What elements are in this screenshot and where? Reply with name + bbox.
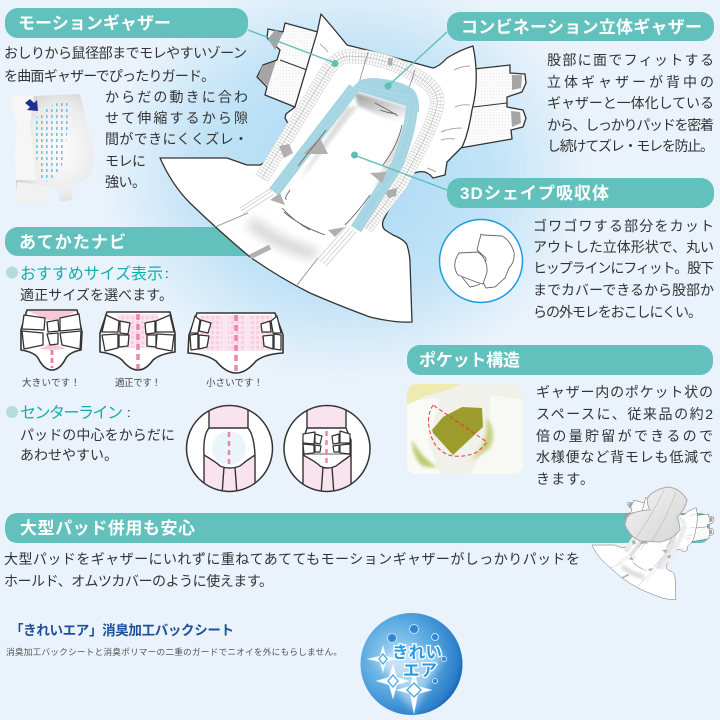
heading: pocket structure: ポケット構造 <box>419 350 520 370</box>
badge: clean air: エア <box>403 662 437 680</box>
side shade <box>298 106 406 196</box>
text: clean air description: 消臭加工バックシートと消臭ポリマーの二重のガードでニオイを外にもらしません。 <box>6 646 342 657</box>
text: combination gather description: し続けてズレ・モレを防止。 <box>547 138 714 154</box>
icon: absorber shape circle <box>440 220 522 302</box>
text: absorber description <box>533 218 714 320</box>
grey shading: lower arc <box>250 222 316 254</box>
diagram: too small <box>188 313 283 373</box>
text: large pad description <box>4 551 580 589</box>
sparkles <box>367 645 432 714</box>
text: motion gather description: からだの動きに合わ <box>105 89 248 105</box>
text: large pad description: 大型パッドをギャザーにいれずに重ねてあててもモーションギャザーがしっかりパッドを <box>4 551 580 567</box>
sparkle glow <box>375 647 444 712</box>
text: motion gather intro: おしりから鼠径部までモレやすいゾーン <box>4 45 247 61</box>
bullet: recommended size: おすすめサイズ表示 <box>20 265 163 283</box>
text: combination gather description <box>547 52 714 154</box>
grey patches <box>279 58 397 198</box>
label: correct fit: 適正です！ <box>115 377 161 389</box>
photo: pocket structure <box>407 384 523 474</box>
text: motion gather intro <box>4 45 247 84</box>
text: combination gather description: 股部に面でフィットする <box>547 52 714 68</box>
diagram: correct fit <box>100 312 175 370</box>
heading: motion gather <box>5 8 248 38</box>
heading: motion gather: モーションギャザー <box>18 14 171 33</box>
bottom mark <box>250 247 270 257</box>
badge: clean air <box>360 613 462 715</box>
label: too small: 小さいです！ <box>206 378 263 389</box>
illustration: small diaper with large pad <box>592 487 714 600</box>
diagram: too large <box>21 310 82 370</box>
text: combination gather description: から、しっかりパッドを密着 <box>547 117 714 133</box>
text: motion gather description: せて伸縮するから隙 <box>105 110 248 126</box>
motion gather band <box>262 56 437 228</box>
heading: large pad band: 大型パッド併用も安心 <box>20 519 195 538</box>
text: absorber description: ヒップラインにフィット。股下 <box>533 260 714 276</box>
large pad <box>625 487 687 542</box>
text: motion gather description: 強い。 <box>105 174 146 190</box>
wing creases <box>320 44 470 172</box>
heading: fitting navigation <box>5 227 260 256</box>
combination gather band <box>272 78 419 231</box>
icon: navy arrow <box>25 99 38 111</box>
text: combination gather description: ギャザーと一体化している <box>547 95 714 111</box>
heading: 3D shape absorber: 3Dシェイプ吸収体 <box>460 184 609 203</box>
text: motion gather intro: を曲面ギャザーでぴったりガード。 <box>4 68 215 84</box>
text: choose size: 適正サイズを選べます。 <box>20 287 173 303</box>
photo: diaper worn with gather dots <box>11 94 94 204</box>
bullet: center line: センターライン <box>20 404 123 422</box>
text: center line description <box>20 427 175 463</box>
label: too large: 大きいです！ <box>22 377 80 389</box>
connector: motion gather <box>248 30 338 67</box>
text: center line description: あわせやすい。 <box>20 447 118 463</box>
heading: combination gather: コンビネーション立体ギャザー <box>461 17 702 37</box>
heading: large pad band <box>5 513 710 543</box>
tail stripes <box>240 189 356 266</box>
text: absorber description: ゴワゴワする部分をカット <box>533 218 714 234</box>
illustration: diaper <box>160 14 526 322</box>
text: pocket structure description <box>536 384 713 487</box>
absorber core <box>281 91 408 232</box>
text: combination gather description: 立体ギャザーが背中の <box>547 74 714 90</box>
gather shadow triangles <box>270 138 387 237</box>
text: pocket structure description: きます。 <box>536 471 594 487</box>
text: absorber description: までカバーできるから股部か <box>533 282 714 298</box>
text: absorber description: らの外モレをおこしにくい。 <box>533 304 702 320</box>
bullet: center line: : <box>127 405 131 420</box>
panel seams <box>215 52 415 285</box>
text: motion gather description: 間ができにくくズレ・ <box>105 131 248 147</box>
heading: pocket structure <box>407 345 713 375</box>
text: motion gather description <box>105 89 248 190</box>
text: pocket structure description: 倍の量貯留ができるので <box>536 428 713 444</box>
text: motion gather description: モレに <box>105 153 146 169</box>
top shade <box>354 92 410 126</box>
heading: combination gather <box>447 12 714 41</box>
text: pocket structure description: スペースに、従来品の約2 <box>536 406 713 422</box>
text: large pad description: ホールド、オムツカバーのように使えます。 <box>4 573 273 589</box>
diagram: center line pad <box>186 403 272 495</box>
diagram: center line fastened <box>284 403 370 495</box>
heading: fitting navigation: あてかたナビ <box>19 232 126 252</box>
text: pocket structure description: ギャザー内のポケット状の <box>536 384 713 400</box>
heading: 3D shape absorber <box>447 178 714 208</box>
text: center line description: パッドの中心をからだに <box>20 427 175 443</box>
outer shell <box>160 14 476 322</box>
connector: combination gather <box>384 32 447 90</box>
badge: clean air: きれい <box>392 643 442 662</box>
bubbles <box>388 624 446 684</box>
right tabs <box>460 65 526 148</box>
text: absorber description: アウトした立体形状で、丸い <box>533 239 714 255</box>
connector: absorber <box>351 152 447 190</box>
bullet: recommended size: : <box>165 266 169 281</box>
heading: clean air back sheet: 「きれいエア」消臭加工バックシート <box>10 622 234 638</box>
left tabs <box>257 23 318 107</box>
text: pocket structure description: 水様便など背モレも低減で <box>536 449 713 465</box>
elastic creases <box>282 103 402 235</box>
